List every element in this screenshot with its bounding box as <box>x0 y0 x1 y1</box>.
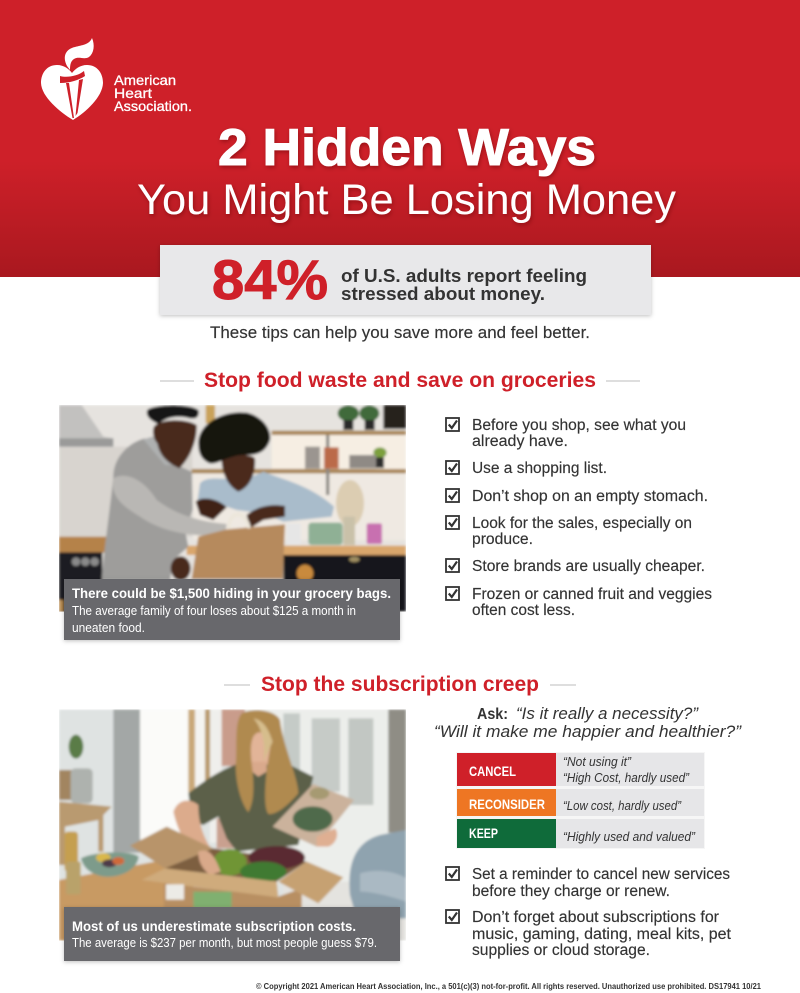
stat panel: 84%: stressed about money. <box>341 283 545 304</box>
man <box>102 438 193 580</box>
icon: heart and torch <box>41 38 103 120</box>
stat panel: 84% <box>160 245 651 315</box>
heading: subscription creep: Stop the subscription creep <box>261 673 539 696</box>
checklist: groceries: Don’t shop on an empty stomach. <box>472 488 708 505</box>
intro text: These tips can help you save more and feel better. <box>210 324 590 342</box>
ask questions <box>434 704 742 741</box>
logo: American Heart Association: Heart <box>114 85 152 101</box>
caption: grocery bags: The average family of four loses about $125 a month in <box>72 603 356 618</box>
checklist: subscriptions: music, gaming, dating, meal kits, pet <box>472 926 732 943</box>
woman <box>197 472 334 522</box>
logo: American Heart Association: American <box>114 72 176 88</box>
checklist: groceries: Store brands are usually cheaper. <box>472 558 705 575</box>
caption: grocery bags <box>64 579 400 640</box>
row: cancel: “Not using it” <box>563 755 632 769</box>
magazine <box>273 784 354 847</box>
copyright footer: © Copyright 2021 American Heart Association, Inc., a 501(c)(3) not-for-profit. All rights reserved. Unauthorized use prohibited. DS17941 10/21 <box>256 982 762 991</box>
sofa <box>349 830 406 918</box>
heading: stop food waste: Stop food waste and save on groceries <box>204 369 596 392</box>
floor <box>283 882 406 941</box>
checklist: subscriptions: supplies or cloud storage. <box>472 942 650 959</box>
caption: subscription costs: Most of us underestimate subscription costs. <box>72 918 356 934</box>
caption: grocery bags: There could be $1,500 hiding in your grocery bags. <box>72 585 391 601</box>
checklist: subscriptions: Don’t forget about subscriptions for <box>472 909 719 926</box>
row: cancel: “High Cost, hardly used” <box>563 771 690 785</box>
row: keep: “Highly used and valued” <box>563 830 696 844</box>
logo: American Heart Association <box>41 38 192 120</box>
row: keep: KEEP <box>469 825 498 841</box>
caption: subscription costs: The average is $237 per month, but most people guess $79. <box>72 935 377 950</box>
ask questions: Ask: <box>477 706 508 723</box>
bottles and bowl <box>65 832 78 872</box>
photo: couple unpacking grocery bag <box>59 405 406 612</box>
checklist: groceries: Use a shopping list. <box>472 460 607 477</box>
ask questions: “Will it make me happier and healthier?” <box>434 722 742 741</box>
checklist: groceries: produce. <box>472 531 533 548</box>
woman <box>188 763 313 852</box>
caption: subscription costs <box>64 907 400 961</box>
caption: grocery bags: uneaten food. <box>72 620 145 635</box>
row: cancel: CANCEL <box>469 763 516 779</box>
title: You Might Be Losing Money <box>137 176 676 224</box>
row: keep <box>457 819 704 848</box>
checklist: groceries: Frozen or canned fruit and veggies <box>472 586 712 603</box>
box and greens <box>130 827 213 868</box>
table <box>59 860 193 941</box>
photo: woman unpacking meal kit box <box>59 709 406 941</box>
ask questions: “Is it really a necessity?” <box>516 704 699 723</box>
checklist: groceries: often cost less. <box>472 602 575 619</box>
logo: American Heart Association: Association. <box>114 98 192 114</box>
row: reconsider <box>457 789 704 816</box>
red header band <box>0 0 800 277</box>
stat panel: 84%: 84% <box>212 248 328 311</box>
checklist: subscriptions: before they charge or renew. <box>472 883 670 900</box>
checklist: groceries <box>446 417 712 619</box>
checklist: groceries: already have. <box>472 433 568 450</box>
checklist: subscriptions <box>446 866 732 959</box>
decision table <box>456 752 705 849</box>
stat panel: 84%: of U.S. adults report feeling <box>341 265 587 286</box>
row: reconsider: RECONSIDER <box>469 796 545 812</box>
row: reconsider: “Low cost, hardly used” <box>563 799 682 813</box>
checklist: groceries: Before you shop, see what you <box>472 417 686 434</box>
checklist: groceries: Look for the sales, especially on <box>472 515 692 532</box>
checklist: subscriptions: Set a reminder to cancel new services <box>472 866 730 883</box>
row: cancel <box>457 753 704 786</box>
bag <box>192 524 285 579</box>
title: 2 Hidden Ways <box>218 119 596 177</box>
title <box>137 119 676 224</box>
